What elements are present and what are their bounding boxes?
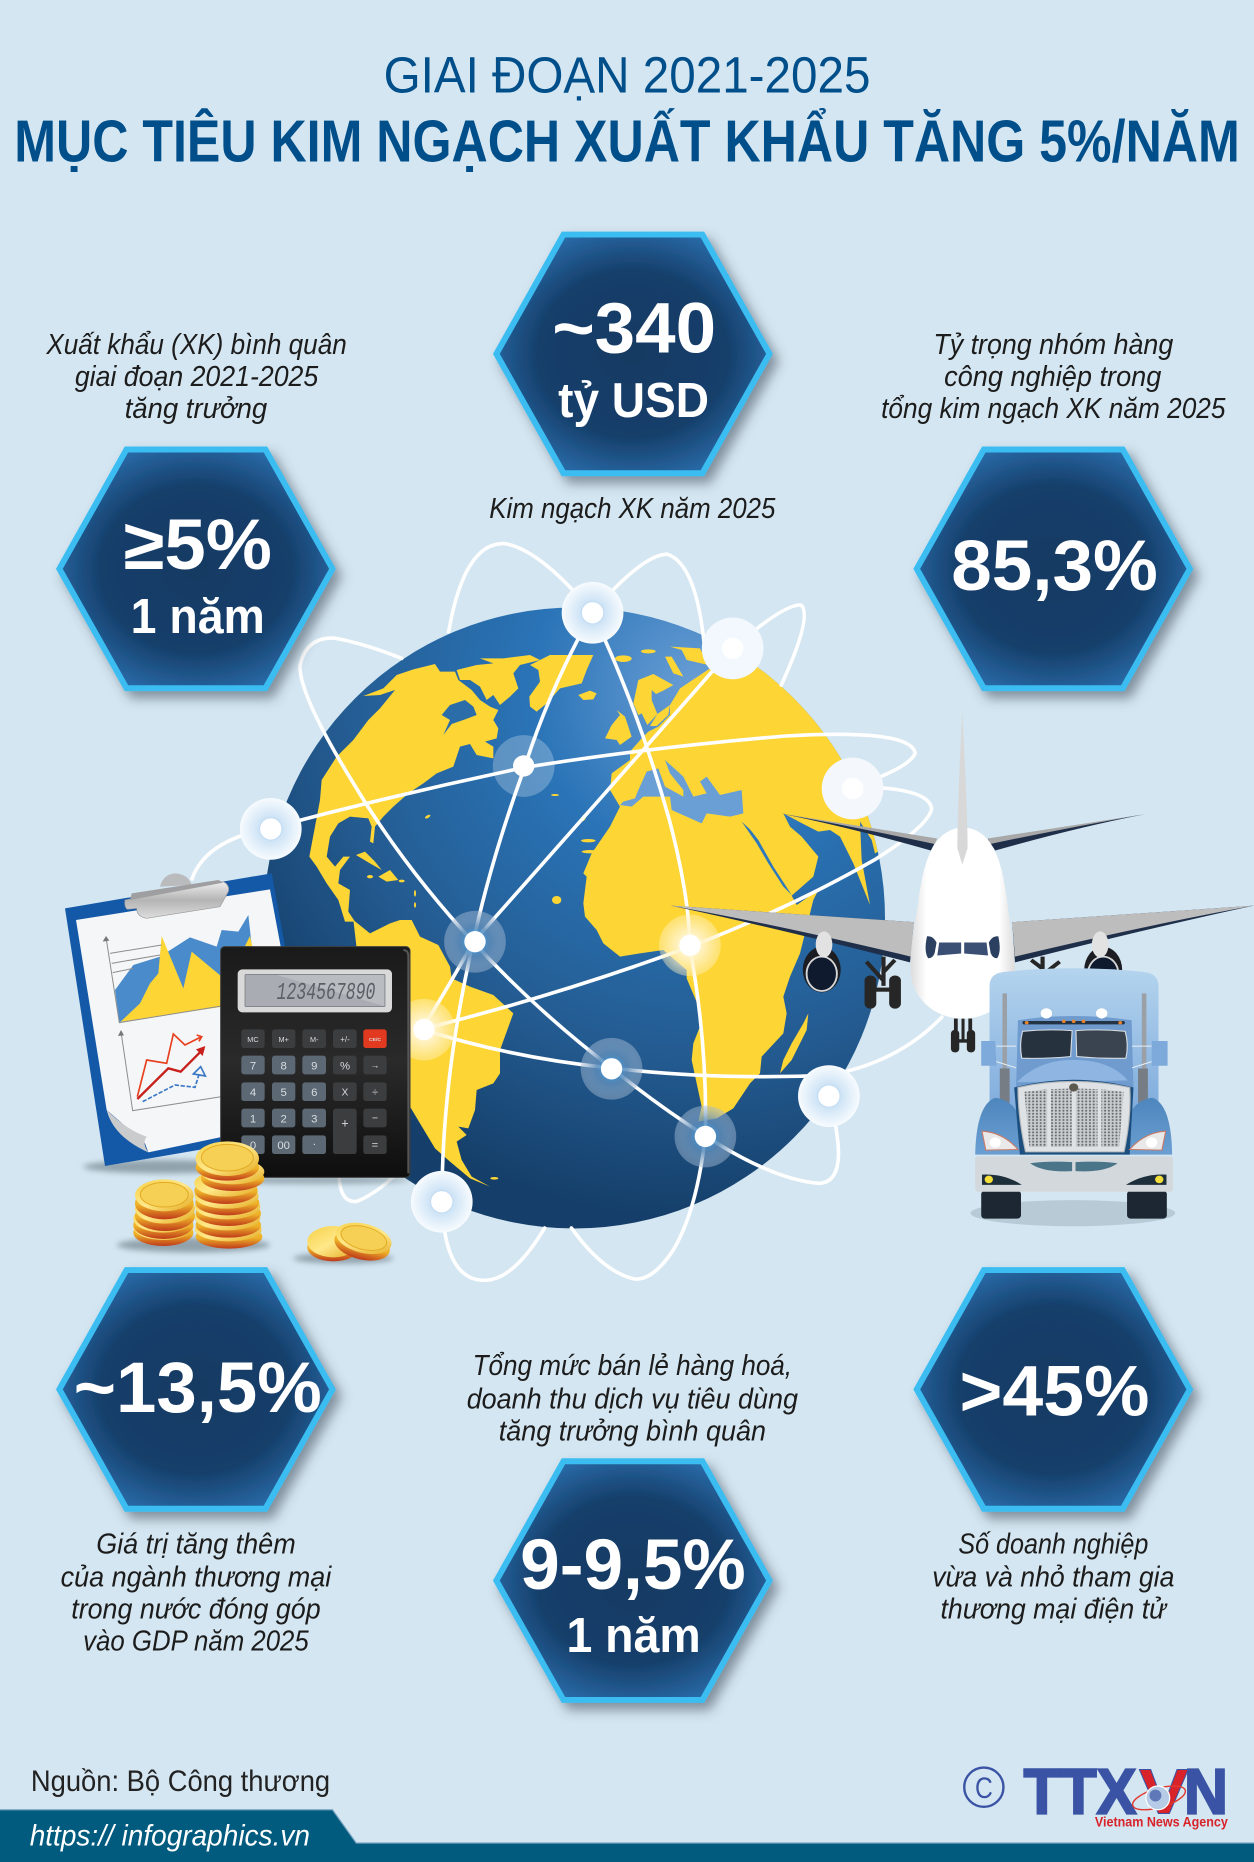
keypad: 0 <box>250 1140 256 1152</box>
Mediterranean <box>620 760 743 823</box>
keypad: 6 <box>311 1087 317 1099</box>
TTXVN logo: C <box>975 1772 993 1805</box>
keypad: M+ <box>278 1035 289 1044</box>
caption: retail sales growth: Tổng mức bán lẻ hàng hoá, <box>473 1350 792 1382</box>
caption: domestic trade value added: vào GDP năm 2025 <box>83 1626 309 1658</box>
hexagon: 340 billion USD: tỷ USD <box>558 374 709 428</box>
node <box>798 1065 860 1127</box>
node <box>674 1106 736 1167</box>
mirrors <box>981 1041 996 1066</box>
ground shadow <box>971 1200 1175 1226</box>
keypad: 2 <box>281 1113 287 1125</box>
coins right <box>307 1217 395 1266</box>
keypad: · <box>312 1139 316 1151</box>
caption: SMEs in e-commerce: thương mại điện tử <box>940 1594 1168 1626</box>
caption: industrial goods share: công nghiệp trong <box>944 361 1162 393</box>
hexagon: 340 billion USD: ~340 <box>552 289 716 369</box>
hexagon: over 45 percent: >45% <box>960 1351 1150 1431</box>
caption: industrial goods share: tổng kim ngạch XK năm 2025 <box>881 393 1226 425</box>
coin stack centre <box>194 1141 264 1249</box>
keypad: ÷ <box>372 1087 378 1099</box>
caption: average export growth: giai đoạn 2021-2025 <box>75 361 318 393</box>
clipboard <box>65 873 310 1166</box>
cab front <box>1016 1016 1134 1089</box>
line chart <box>118 1030 222 1111</box>
cockpit windows <box>926 936 1000 958</box>
tailplane <box>781 814 937 851</box>
keypad: CE/C <box>369 1037 381 1043</box>
windshield <box>1021 1030 1072 1058</box>
airplane and truck <box>671 712 1254 1226</box>
keypad: = <box>372 1139 379 1151</box>
source note: Nguồn: Bộ Công thương <box>31 1765 330 1798</box>
node <box>822 758 884 819</box>
TTXVN logo: V <box>1139 1755 1189 1827</box>
caption: retail sales growth: tăng trưởng bình quân <box>499 1415 766 1447</box>
Scandinavia <box>633 674 673 725</box>
hexagon: 9 to 9.5 percent <box>496 1461 770 1700</box>
exhaust stacks <box>1002 993 1007 1104</box>
caption: industrial goods share: Tỷ trọng nhóm hàng <box>933 329 1173 361</box>
hexagon: at least 5 percent <box>59 449 332 688</box>
hexagon: 85.3 percent <box>917 449 1190 688</box>
title <box>14 47 1240 174</box>
grille <box>1018 1081 1130 1152</box>
hexagon: over 45 percent <box>917 1270 1190 1509</box>
keypad: +/- <box>340 1035 350 1044</box>
keypad: → <box>370 1061 380 1071</box>
node <box>393 999 455 1060</box>
keypad <box>241 1029 387 1154</box>
globe sphere with continents <box>264 608 937 1228</box>
Americas north <box>309 655 597 922</box>
caption: SMEs in e-commerce: vừa và nhỏ tham gia <box>932 1562 1174 1594</box>
node <box>562 582 623 644</box>
tail fin <box>957 712 968 865</box>
caption: domestic trade value added: trong nước đóng góp <box>71 1594 321 1626</box>
display <box>238 969 392 1012</box>
paper <box>76 889 310 1152</box>
TTXVN logo: TTX <box>1024 1755 1137 1827</box>
caption: SMEs in e-commerce: Số doanh nghiệp <box>958 1528 1148 1560</box>
caption: domestic trade value added <box>61 1528 332 1658</box>
wings <box>671 906 914 962</box>
Red Sea <box>742 822 792 895</box>
Arctic islands <box>615 655 632 662</box>
metal clip <box>125 873 229 918</box>
landing gear <box>865 957 1060 1052</box>
airplane <box>671 712 1254 1052</box>
South America and Madagascar <box>353 920 808 1187</box>
hexagon: at least 5 percent: 1 năm <box>131 590 265 644</box>
hexagon: 340 billion USD <box>496 235 770 473</box>
caption: retail sales growth <box>467 1350 798 1447</box>
caption: average export growth: tăng trưởng <box>125 393 267 425</box>
caption: average export growth <box>45 329 347 425</box>
node <box>702 618 764 679</box>
calculator <box>221 947 410 1177</box>
coin stack left <box>133 1179 195 1246</box>
node <box>659 914 721 976</box>
network nodes <box>240 582 884 1233</box>
keypad: 00 <box>277 1140 290 1152</box>
caption: domestic trade value added: của ngành thương mại <box>61 1562 332 1594</box>
keypad: 7 <box>250 1060 256 1072</box>
fuselage <box>911 827 1015 1019</box>
hexagon: 13.5 percent <box>59 1270 332 1509</box>
engines <box>803 931 1122 992</box>
keypad: − <box>372 1113 378 1125</box>
truck <box>971 968 1175 1226</box>
website link: https:// infographics.vn <box>30 1819 310 1852</box>
title: GIAI ĐOẠN 2021-2025 <box>384 47 870 104</box>
keypad: 4 <box>250 1087 256 1099</box>
clipboard, calculator and coins <box>65 873 410 1266</box>
cab <box>990 968 1159 1113</box>
shadows <box>83 1160 243 1173</box>
continents map <box>309 647 937 1187</box>
keypad: 1 <box>250 1113 256 1125</box>
caption: export turnover 2025: Kim ngạch XK năm 2025 <box>489 493 776 525</box>
caption: retail sales growth: doanh thu dịch vụ tiêu dùng <box>467 1383 798 1415</box>
display: 1234567890 <box>277 980 375 1007</box>
keypad: 8 <box>281 1060 287 1072</box>
keypad: MC <box>247 1035 259 1044</box>
fenders <box>975 1098 1026 1155</box>
keypad: 5 <box>281 1087 287 1099</box>
hexagon: at least 5 percent: ≥5% <box>124 505 272 585</box>
network and orbit lines <box>192 544 942 1280</box>
TTXVN logo: Vietnam News Agency <box>1095 1814 1228 1829</box>
keypad: 9 <box>311 1060 317 1072</box>
keypad: M- <box>310 1035 319 1044</box>
caption: SMEs in e-commerce <box>932 1528 1174 1626</box>
caption: average export growth: Xuất khẩu (XK) bình quân <box>45 329 347 361</box>
keypad: + <box>341 1117 349 1131</box>
Eurasia and Africa <box>582 646 878 1122</box>
TTXVN logo: N <box>1184 1755 1228 1827</box>
node <box>444 911 506 973</box>
hexagon: 9 to 9.5 percent: 9-9,5% <box>520 1525 746 1605</box>
tyres <box>981 1191 1021 1219</box>
British Isles <box>605 710 632 745</box>
caption: domestic trade value added: Giá trị tăng thêm <box>96 1528 296 1560</box>
hexagon: 9 to 9.5 percent: 1 năm <box>566 1609 701 1663</box>
caption: industrial goods share <box>881 329 1226 425</box>
bumper <box>975 1156 1173 1192</box>
node <box>411 1171 473 1233</box>
roof lights <box>1023 1008 1125 1024</box>
node <box>493 735 555 797</box>
hexagon: 85.3 percent: 85,3% <box>951 526 1158 606</box>
hexagon: 13.5 percent: ~13,5% <box>74 1348 322 1428</box>
area chart <box>103 915 252 1023</box>
node <box>581 1038 642 1100</box>
keypad: 3 <box>311 1113 317 1125</box>
node <box>240 798 302 860</box>
keypad: X <box>342 1088 349 1099</box>
footer band <box>0 1810 1254 1862</box>
keypad: % <box>340 1060 350 1072</box>
headlights <box>982 1131 1018 1150</box>
TTXVN logo <box>964 1755 1228 1829</box>
